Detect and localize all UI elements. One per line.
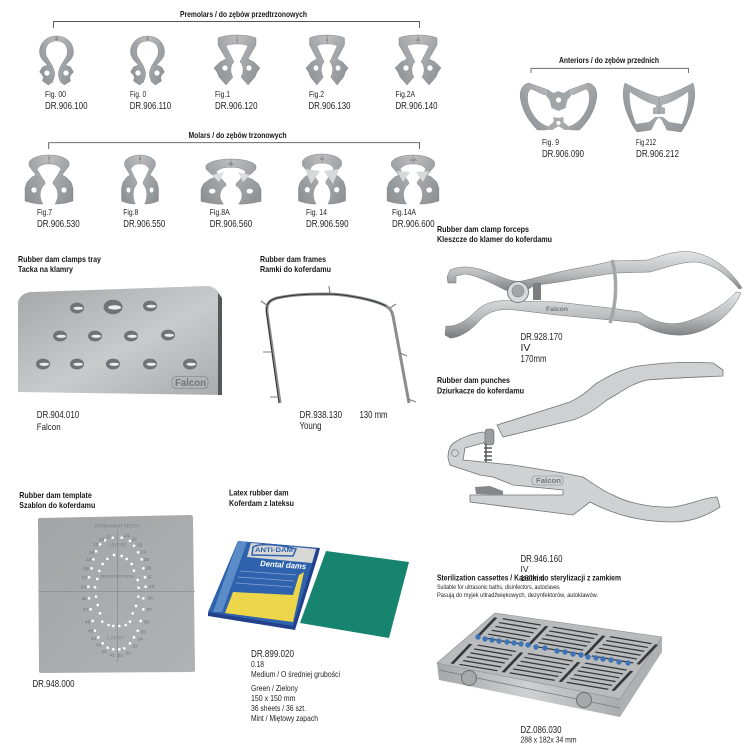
template plate: 21 <box>124 533 130 539</box>
clamp: Fig.212 <box>623 83 695 132</box>
dental dams box: ANTI-DAM <box>255 548 293 554</box>
section: latex rubber dam <box>208 488 409 723</box>
label: DR.946.160: DR.946.160 <box>520 553 563 565</box>
clamp: Fig. 9 <box>520 83 597 130</box>
dental dams box <box>208 541 320 630</box>
bracket: anteriors <box>531 68 688 73</box>
template plate: DECIDUOUS TEETH <box>101 574 134 578</box>
clamp: Fig.14A: 14A <box>409 157 417 162</box>
template plate: Lower <box>107 634 126 641</box>
template plate: 17 <box>82 575 87 581</box>
forceps illustration: Falcon <box>546 307 568 313</box>
clamp: Fig. 0 <box>130 36 164 85</box>
template plate: 18 <box>81 585 86 591</box>
bracket: molars <box>49 143 419 149</box>
clamp: Fig. 14 <box>298 154 346 204</box>
note: Polish: Pasują do myjek ultradźwiękowych, dezynfektorów, autoklawów. <box>437 592 598 599</box>
heading: punches Polish: Dziurkacze do koferdamu <box>437 386 524 396</box>
heading: forceps Polish: Kleszcze do klamer do koferdamu <box>437 234 552 244</box>
heading: premolars: Premolars / do zębów przedtrzonowych <box>180 9 307 19</box>
clamp: Fig.7: 7 <box>48 156 51 161</box>
label: DR.904.010: DR.904.010 <box>37 409 79 421</box>
heading: punches: Rubber dam punches <box>437 375 510 385</box>
label: sheets: 36 sheets / 36 szt. <box>251 703 306 713</box>
template plate: PERMANENT TEETH <box>95 524 139 529</box>
template plate: 25 <box>144 557 149 563</box>
label: Fig. 00: Fig. 00 <box>45 89 66 99</box>
label: DR.906.090: DR.906.090 <box>542 148 584 160</box>
label: size: 150 x 150 mm <box>251 693 296 703</box>
heading: latex Polish: Koferdam z lateksu <box>229 498 294 508</box>
label: DR.938.130: DR.938.130 <box>300 409 342 421</box>
label: Fig.2A: Fig.2A <box>396 89 415 99</box>
punch illustration: Falcon <box>536 478 561 485</box>
label: 160mm: 160mm <box>520 573 544 583</box>
label: flavour: Mint / Miętowy zapach <box>251 713 318 723</box>
clamp: Fig. 2A: 2A <box>416 37 421 42</box>
template plate: 26 <box>146 565 151 571</box>
heading: template Polish: Szablon do koferdamu <box>19 500 95 510</box>
clamp: Fig.8A: 8A <box>229 161 234 166</box>
label: thickness: 0.18 <box>251 659 264 669</box>
label: Fig.212: Fig.212 <box>636 137 656 147</box>
label: Fig. 14: Fig. 14 <box>306 207 327 217</box>
label: DR.899.020: DR.899.020 <box>251 648 294 660</box>
clamp: Fig. 14: 14 <box>320 156 325 161</box>
template plate: 13 <box>93 542 99 548</box>
clamp: Fig.14A <box>387 155 439 204</box>
template plate: 14 <box>89 549 95 555</box>
label: 170mm: 170mm <box>520 353 547 365</box>
template plate: 31 <box>118 653 123 659</box>
heading: forceps: Rubber dam clamp forceps <box>437 224 529 234</box>
label: DR.906.530: DR.906.530 <box>37 218 80 230</box>
label: medium: Medium / O średniej grubości <box>251 669 340 679</box>
green latex sheet <box>300 551 409 638</box>
template plate: 45 <box>88 629 94 635</box>
heading: cassettes: Sterilization cassettes / Kasetki do sterylizacji z zamkiem <box>437 573 621 583</box>
label: DR.906.212: DR.906.212 <box>636 148 679 160</box>
section: frames <box>260 254 416 432</box>
template plate: 46 <box>85 619 91 625</box>
template plate: 23 <box>137 542 143 548</box>
label: IV: IV <box>520 564 529 574</box>
template plate: 47 <box>83 607 89 613</box>
template plate: 33 <box>132 644 138 650</box>
template plate: 12 <box>99 537 105 543</box>
label: Fig.7: Fig.7 <box>37 207 52 217</box>
label: DR.906.550: DR.906.550 <box>123 218 165 230</box>
clamp: Fig.7 <box>25 155 73 204</box>
label: DR.906.130: DR.906.130 <box>308 100 351 112</box>
label: IV: IV <box>520 342 530 354</box>
template plate: 11 <box>106 533 112 539</box>
template plate: 15 <box>86 557 92 563</box>
template plate: 16 <box>83 566 89 572</box>
label: Young: Young <box>300 420 322 432</box>
template plate: 34 <box>137 636 143 642</box>
label: DR.906.600: DR.906.600 <box>392 218 435 230</box>
clamp: Fig. 1 <box>214 35 260 85</box>
template plate: 27 <box>148 574 153 580</box>
heading: frames: Rubber dam frames <box>260 254 326 264</box>
label: Falcon: Falcon <box>37 422 61 433</box>
template plate: 44 <box>91 636 96 642</box>
cassette illustration <box>437 613 662 717</box>
template plate: 28 <box>149 584 154 590</box>
heading: template: Rubber dam template <box>19 490 92 500</box>
heading: latex: Latex rubber dam <box>229 488 289 498</box>
clamp: Fig. 2A <box>395 35 441 85</box>
clamp: Fig.8 <box>122 155 158 204</box>
template plate: Upper <box>108 542 127 549</box>
section: clamp forceps <box>437 224 742 365</box>
label: Fig. 9: Fig. 9 <box>542 137 559 147</box>
bracket: premolars <box>54 22 420 28</box>
template plate: 36 <box>144 620 149 626</box>
label: DR.928.170: DR.928.170 <box>520 331 563 343</box>
label: DR.906.110: DR.906.110 <box>130 100 171 112</box>
label: DR.906.590: DR.906.590 <box>306 218 349 230</box>
heading: frames Polish: Ramki do koferdamu <box>260 264 331 274</box>
heading: molars: Molars / do zębów trzonowych <box>188 130 286 140</box>
clamp: Fig.8A <box>201 159 261 204</box>
tray illustration <box>18 286 222 395</box>
label: dimensions: 288 x 182x 34 mm <box>520 734 576 744</box>
tray illustration: Falcon <box>175 378 206 389</box>
template plate: 24 <box>141 549 146 555</box>
section: premolars <box>40 9 441 112</box>
template plate: 37 <box>146 607 152 613</box>
section: anteriors <box>520 55 695 160</box>
template plate: 38 <box>147 596 153 602</box>
template plate: 35 <box>141 629 146 635</box>
template plate: 43 <box>95 643 101 649</box>
section: sterilization cassettes <box>437 573 662 744</box>
dental dams box: Dental dams <box>260 559 307 571</box>
clamp: Fig. 0: 0 <box>146 36 149 41</box>
label: Fig.8A: Fig.8A <box>210 207 230 217</box>
punch illustration <box>448 362 723 522</box>
clamp: Fig. 00: 00 <box>54 36 59 41</box>
clamp: Fig.8: 8 <box>139 156 142 161</box>
label: 130 mm: 130 mm <box>360 409 388 421</box>
note: suitable: Suitable for ultrasonic baths, disinfectors, autoclaves <box>437 584 560 591</box>
heading: clamps tray Polish: Tacka na klamry <box>18 264 73 274</box>
section: template <box>19 490 195 690</box>
template plate: 42 <box>101 649 107 655</box>
frame illustration <box>261 286 416 403</box>
template plate: 32 <box>125 650 131 656</box>
forceps illustration <box>445 251 742 338</box>
section: molars <box>25 130 439 230</box>
label: Fig.1: Fig.1 <box>215 89 230 99</box>
clamp: Fig. 1: 1 <box>236 37 239 42</box>
template plate: 48 <box>81 596 87 602</box>
label: Fig.8: Fig.8 <box>123 207 139 217</box>
label: DZ.086.030: DZ.086.030 <box>520 724 562 736</box>
section: punches <box>437 362 723 583</box>
clamp: Fig. 00 <box>40 36 74 85</box>
template plate: 41 <box>109 652 115 658</box>
label: DR.906.120: DR.906.120 <box>215 100 258 112</box>
label: DR.948.000: DR.948.000 <box>32 678 75 690</box>
section: clamps tray <box>18 254 222 433</box>
heading: anteriors: Anteriors / do zębów przednich <box>559 55 659 65</box>
label: DR.906.560: DR.906.560 <box>210 218 252 230</box>
label: colour: Green / Zielony <box>251 683 299 693</box>
label: Fig.14A: Fig.14A <box>392 207 416 217</box>
clamp: Fig. 2 <box>306 35 348 85</box>
label: DR.906.100: DR.906.100 <box>45 100 88 112</box>
label: Fig.2: Fig.2 <box>309 89 324 99</box>
clamp: Fig. 2: 2 <box>326 37 329 42</box>
label: Fig. 0: Fig. 0 <box>130 89 146 99</box>
heading: clamps tray: Rubber dam clamps tray <box>18 254 101 264</box>
template plate: 22 <box>132 537 137 543</box>
template plate <box>38 515 195 673</box>
label: DR.906.140: DR.906.140 <box>396 100 438 112</box>
